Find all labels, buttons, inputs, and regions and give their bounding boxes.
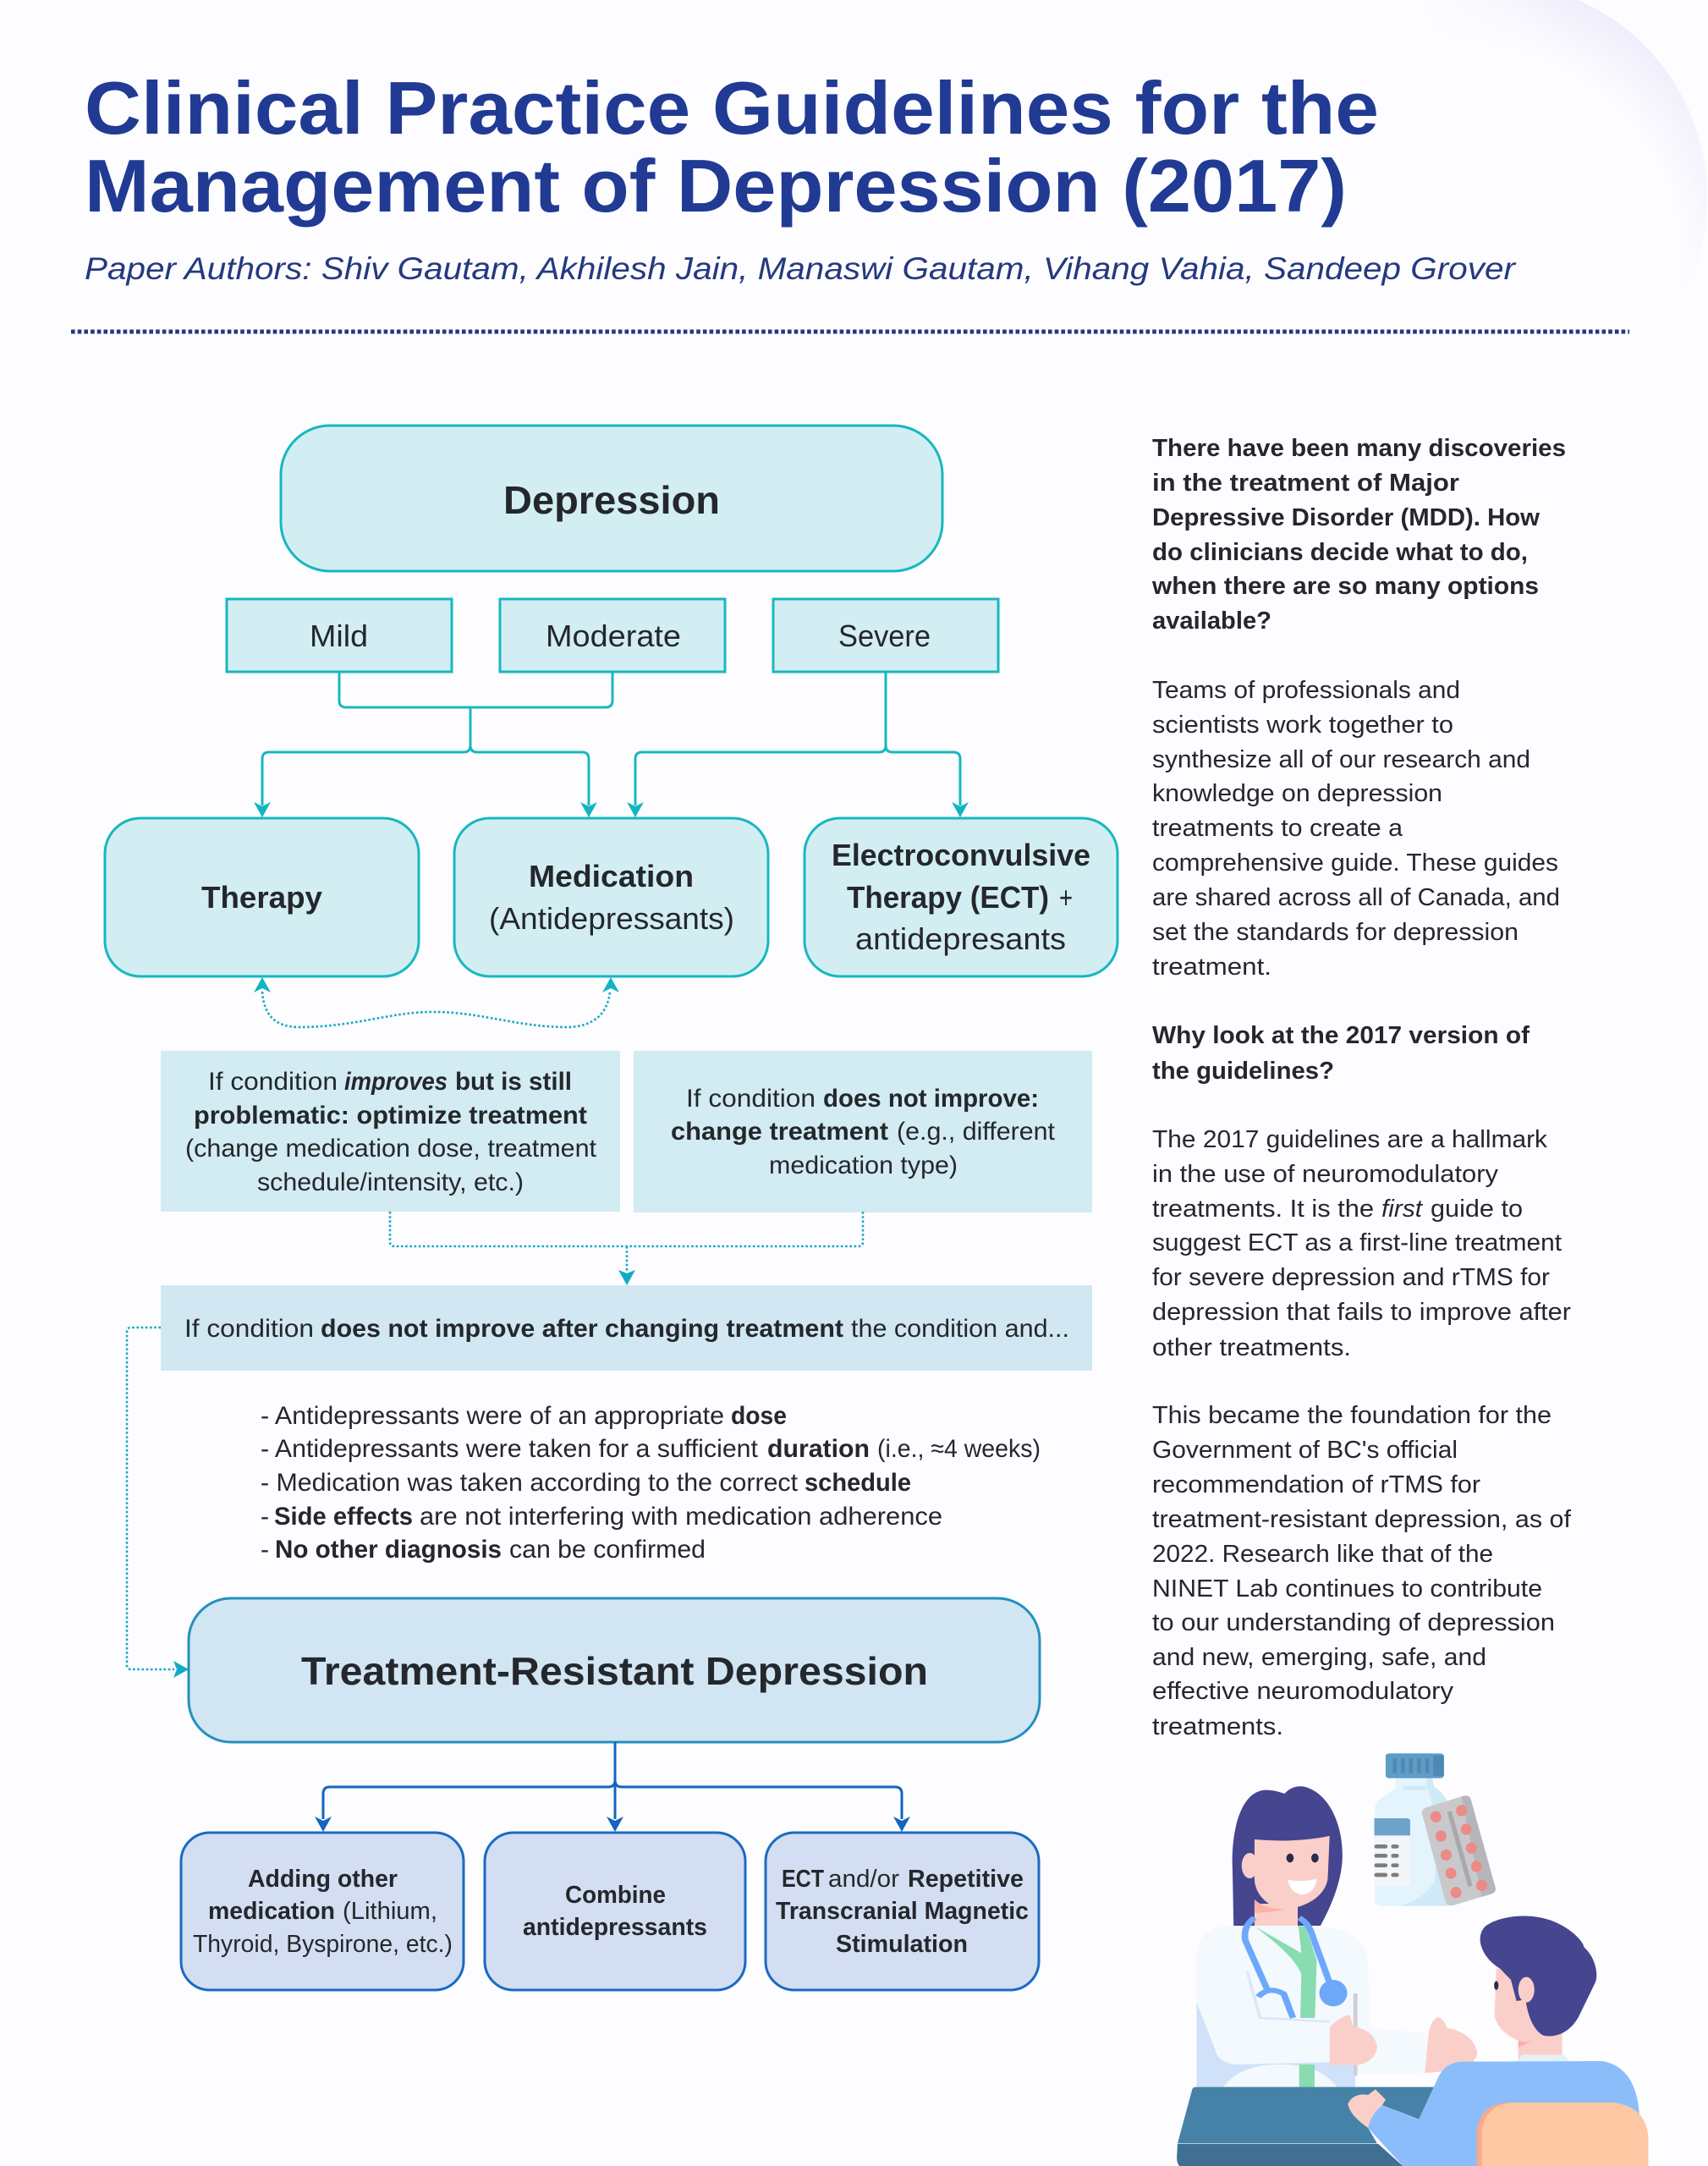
paragraph: hallmark <box>1152 1126 1571 1361</box>
box: condition improves: problematic: optimize treatment <box>194 1102 587 1130</box>
paragraph: teams of professionals: synthesize all of our research and <box>1152 746 1530 773</box>
checklist text: (i.e., ≈4 weeks) <box>877 1435 1041 1463</box>
box: ECT: antidepresants <box>855 921 1066 956</box>
checklist text: - <box>261 1503 269 1531</box>
intro question <box>1151 435 1566 635</box>
dotted arrow to Treatment-Resistant Depression <box>127 1328 189 1678</box>
paragraph: teams of professionals: knowledge on depression <box>1152 780 1442 807</box>
box: condition improves: (change medication dose, treatment <box>185 1135 597 1163</box>
paragraph: teams of professionals: comprehensive guide. These guides <box>1152 849 1558 877</box>
box: combine antidepressants: Combine <box>565 1882 666 1909</box>
title <box>85 66 1379 228</box>
box: condition does not improve: (e.g., different <box>897 1118 1056 1146</box>
paragraph: foundation: NINET Lab continues to contribute <box>1152 1575 1542 1603</box>
box: Moderate: Moderate <box>546 618 681 653</box>
box: ECT and rTMS: Transcranial Magnetic <box>776 1898 1029 1925</box>
decorative corner circle <box>1277 0 1708 413</box>
paragraph: teams of professionals: Teams of professionals and <box>1152 677 1460 704</box>
paragraph: teams of professionals: treatment. <box>1152 954 1271 981</box>
paragraph: hallmark: first <box>1381 1196 1424 1223</box>
box: Moderate <box>500 599 725 672</box>
connectors: severity to treatment <box>254 673 969 817</box>
box: does not improve after changing treatment <box>161 1285 1092 1371</box>
box: condition improves: If condition <box>208 1068 338 1096</box>
box: condition improves: but is still <box>455 1068 572 1096</box>
intro question: when there are so many options <box>1151 573 1539 600</box>
paragraph: teams of professionals: are shared across all of Canada, and <box>1152 884 1560 911</box>
checklist text: Side effects <box>274 1503 413 1531</box>
box: Mild: Mild <box>310 618 368 653</box>
paragraph: hallmark: The 2017 guidelines are a hallmark <box>1152 1126 1548 1153</box>
box: condition does not improve: change treatment <box>671 1118 888 1146</box>
box: Medication: Medication <box>529 859 694 893</box>
subtitle: paper authors: Paper Authors: Shiv Gautam, Akhilesh Jain, Manaswi Gautam, Vihang Vahia, Sandeep Grover <box>85 251 1517 286</box>
icon: desk <box>1177 2087 1437 2166</box>
box: ECT <box>805 818 1118 976</box>
paragraph: foundation: to our understanding of depression <box>1152 1609 1555 1636</box>
box: does not improve after changing treatment: the condition and... <box>851 1315 1069 1343</box>
box: Medication <box>454 818 768 976</box>
box: adding other medication: (Lithium, <box>343 1898 437 1925</box>
box: condition improves: schedule/intensity, etc.) <box>257 1168 524 1196</box>
intro question: in the treatment of Major <box>1152 470 1459 497</box>
figure: patient <box>1348 1916 1648 2166</box>
intro question: There have been many discoveries <box>1152 435 1566 462</box>
box: condition does not improve: If condition <box>686 1085 816 1113</box>
checklist text: are not interfering with medication adherence <box>420 1503 942 1531</box>
paragraph: teams of professionals: set the standards for depression <box>1152 919 1519 946</box>
checklist text: schedule <box>805 1469 911 1497</box>
paragraph: hallmark: suggest ECT as a first-line treatment <box>1152 1229 1562 1256</box>
paragraph: hallmark: for severe depression and rTMS for <box>1152 1264 1550 1291</box>
box: ECT: Therapy (ECT) <box>847 880 1049 915</box>
box: adding other medication <box>181 1833 464 1990</box>
box: Medication: (Antidepressants) <box>489 901 734 936</box>
box: ECT: Electroconvulsive <box>832 838 1090 872</box>
box: Therapy: Therapy <box>201 880 322 915</box>
box: does not improve after changing treatment: does not improve after changing treatment <box>321 1315 843 1343</box>
paragraph: teams of professionals: treatments to create a <box>1152 815 1403 842</box>
paragraph: hallmark: depression that fails to improve after <box>1152 1299 1571 1326</box>
box: condition does not improve <box>634 1051 1092 1212</box>
paragraph: hallmark: treatments. It is the <box>1152 1196 1374 1223</box>
subheading: why 2017 <box>1152 1022 1530 1085</box>
box: condition does not improve: does not improve: <box>823 1085 1039 1113</box>
checklist text: - Antidepressants were taken for a sufficient <box>261 1435 759 1463</box>
intro question: available? <box>1152 607 1271 635</box>
subheading: why 2017: the guidelines? <box>1152 1058 1334 1085</box>
box: Mild <box>227 599 452 672</box>
checklist text: dose <box>731 1402 787 1430</box>
box: Severe: Severe <box>838 618 931 653</box>
paragraph: hallmark: in the use of neuromodulatory <box>1152 1161 1499 1188</box>
box: adding other medication: medication <box>208 1898 335 1925</box>
subheading: why 2017: Why look at the 2017 version of <box>1152 1022 1530 1049</box>
right column: explanatory text <box>1151 435 1572 1740</box>
dotted arrow between Therapy and Medication <box>254 977 619 1027</box>
box: combine antidepressants: antidepressants <box>523 1914 707 1941</box>
box: does not improve after changing treatment: If condition <box>184 1315 314 1343</box>
paragraph: foundation: effective neuromodulatory <box>1152 1678 1454 1705</box>
box: ECT and rTMS: Repetitive <box>908 1866 1024 1893</box>
box: adding other medication: Adding other <box>248 1866 398 1893</box>
box: Therapy <box>105 818 419 976</box>
intro question: Depressive Disorder (MDD). How <box>1152 504 1540 531</box>
checklist text: - Medication was taken according to the correct <box>261 1469 799 1497</box>
checklist text: can be confirmed <box>509 1536 706 1564</box>
box: adding other medication: Thyroid, Byspirone, etc.) <box>193 1931 453 1958</box>
box: Depression <box>281 426 942 571</box>
icon: medicine bottle <box>1375 1753 1448 1906</box>
box: Treatment-Resistant Depression <box>189 1598 1040 1742</box>
box: condition does not improve: medication type) <box>769 1152 958 1179</box>
dotted connector to next step <box>390 1212 863 1285</box>
paragraph: foundation: Government of BC's official <box>1152 1437 1458 1464</box>
intro question: do clinicians decide what to do, <box>1152 539 1528 566</box>
box: Treatment-Resistant Depression: Treatment-Resistant Depression <box>301 1649 928 1693</box>
paragraph: teams of professionals <box>1152 677 1560 981</box>
box: combine antidepressants <box>485 1833 745 1990</box>
title: Clinical Practice Guidelines for the <box>85 66 1379 150</box>
checklist text: duration <box>767 1435 870 1463</box>
title: Management of Depression (2017) <box>85 144 1347 228</box>
box: condition improves: improves <box>344 1068 448 1096</box>
paragraph: foundation: This became the foundation for the <box>1152 1402 1551 1429</box>
box: Severe <box>773 599 998 672</box>
paragraph: foundation: recommendation of rTMS for <box>1152 1471 1480 1498</box>
paragraph: hallmark: other treatments. <box>1152 1334 1351 1361</box>
connectors: resistant depression to options <box>315 1742 910 1832</box>
box: ECT and rTMS: Stimulation <box>836 1931 968 1958</box>
checklist text: - <box>261 1536 269 1564</box>
figure: doctor <box>1196 1786 1477 2087</box>
box: ECT and rTMS: ECT <box>782 1866 824 1893</box>
illustration: doctor and patient <box>1177 1753 1648 2166</box>
box: condition improves <box>161 1051 620 1212</box>
box: ECT and rTMS <box>766 1833 1039 1990</box>
box: ECT and rTMS: and/or <box>828 1866 899 1893</box>
checklist text: - Antidepressants were of an appropriate <box>261 1402 724 1430</box>
flowchart <box>105 426 1118 1990</box>
box: Depression: Depression <box>503 478 720 522</box>
paragraph: foundation: treatment-resistant depression, as of <box>1152 1506 1572 1533</box>
paragraph: foundation <box>1152 1402 1572 1740</box>
paragraph: hallmark: guide to <box>1431 1196 1523 1223</box>
checklist text: No other diagnosis <box>275 1536 502 1564</box>
checklist text <box>261 1402 1041 1564</box>
icon: blister pack <box>1422 1795 1496 1905</box>
box: ECT: + <box>1059 880 1073 915</box>
paragraph: foundation: and new, emerging, safe, and <box>1152 1644 1486 1671</box>
paragraph: foundation: 2022. Research like that of the <box>1152 1541 1493 1568</box>
paragraph: teams of professionals: scientists work together to <box>1152 712 1453 739</box>
paragraph: foundation: treatments. <box>1152 1713 1283 1740</box>
